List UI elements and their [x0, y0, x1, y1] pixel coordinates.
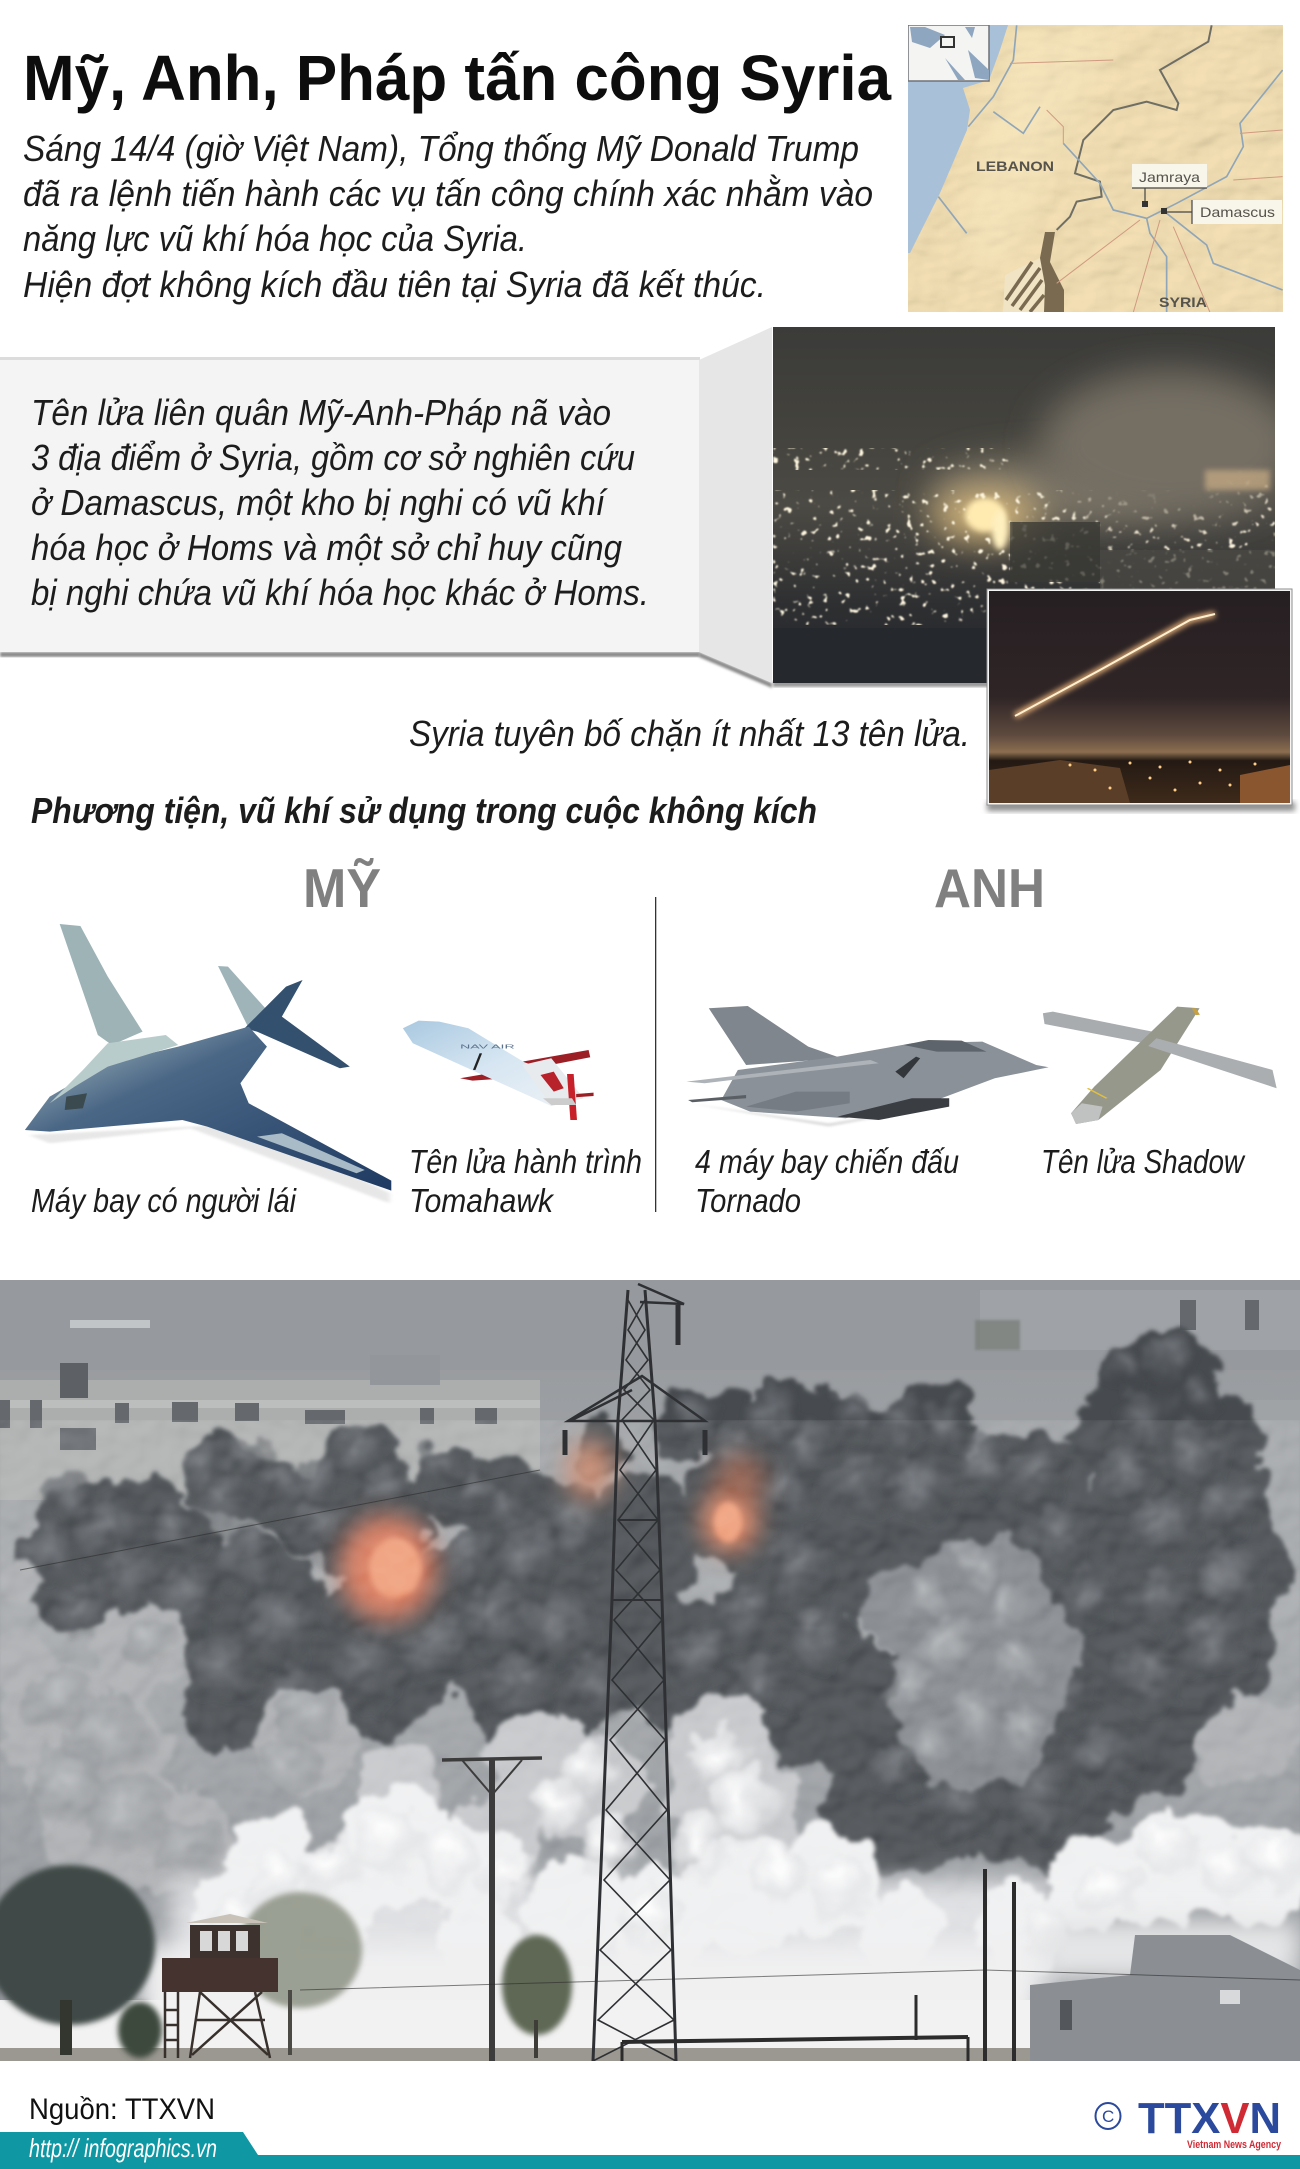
- heading: UK: ANH: [934, 857, 1045, 919]
- ruined building: [1030, 1935, 1300, 2061]
- title: Mỹ, Anh, Pháp tấn công Syria: [23, 42, 891, 114]
- fire glow: [340, 1440, 765, 1620]
- intro text block: [23, 128, 873, 305]
- white smoke: [170, 1880, 1050, 1990]
- heading: USA: MỸ: [303, 857, 381, 919]
- white smoke billows: [210, 1730, 1300, 1956]
- buildings: [0, 1290, 1300, 1500]
- ground: [140, 1945, 1040, 2050]
- panel text: hóa học ở Homs và một sở chỉ huy cũng: [31, 527, 622, 568]
- agency wordmark: TTXVN: [1138, 2094, 1281, 2143]
- label: Tomahawk: [409, 1143, 642, 1219]
- map label Lebanon: LEBANON: [976, 158, 1054, 174]
- map label Jamraya: [1132, 164, 1207, 207]
- trees: [0, 1865, 572, 2058]
- photo: smoke over city: [0, 1280, 1300, 2061]
- footer url: http:// infographics.vn: [29, 2133, 217, 2163]
- utility pole: [442, 1758, 542, 2061]
- divider between countries: [655, 897, 656, 1212]
- map label Damascus: [1161, 200, 1282, 224]
- caption: Syria claim: Syria tuyên bố chặn ít nhất 13 tên lửa.: [409, 713, 970, 754]
- watchtower: [162, 1914, 278, 2058]
- map label Jamraya: Jamraya: [1139, 169, 1200, 185]
- panel fold: [699, 327, 772, 683]
- source line: Nguồn: TTXVN: [29, 2093, 215, 2126]
- panel text: ở Damascus, một kho bị nghi có vũ khí: [31, 482, 608, 523]
- icon: Tomahawk missile: NAV AIR: [460, 1044, 515, 1050]
- poles and field frame: [20, 1470, 1300, 2061]
- dark smoke billows: [23, 1336, 1264, 1844]
- light grey smoke: [0, 1560, 1300, 1893]
- icon: Tomahawk missile: [403, 1021, 594, 1120]
- intro text block: năng lực vũ khí hóa học của Syria.: [23, 218, 527, 259]
- panel text: 3 địa điểm ở Syria, gồm cơ sở nghiên cứu: [31, 437, 635, 478]
- dark smoke: [21, 1332, 1290, 1876]
- copyright mark: C: [1102, 2107, 1114, 2126]
- heading: weapons used: Phương tiện, vũ khí sử dụng trong cuộc không kích: [31, 790, 817, 831]
- golan hatched area: [1003, 232, 1064, 312]
- intro text block: Hiện đợt không kích đầu tiên tại Syria đã kết thúc.: [23, 264, 766, 305]
- panel: strike summary: [0, 327, 772, 688]
- icon: Tornado fighter jet: [686, 1006, 1049, 1127]
- intro text block: Sáng 14/4 (giờ Việt Nam), Tổng thống Mỹ Donald Trump: [23, 128, 859, 169]
- photo: Damascus night explosion: [773, 327, 1300, 687]
- label: Tornado: 4 máy bay chiến đấu: [695, 1143, 959, 1180]
- copyright mark: [1096, 2103, 1120, 2129]
- panel text: [31, 392, 649, 613]
- label: Tornado: [695, 1143, 959, 1219]
- logo: TTXVN: [1096, 2094, 1282, 2151]
- intro text block: đã ra lệnh tiến hành các vụ tấn công chính xác nhằm vào: [23, 173, 873, 214]
- map of Lebanon and Syria: [908, 25, 1283, 312]
- label: Shadow missile: Tên lửa Shadow: [1041, 1143, 1246, 1180]
- transmission pylon: [565, 1284, 705, 2061]
- footer band: [0, 2132, 1300, 2169]
- inset locator map: [908, 25, 989, 81]
- photo: missile streak over city: [987, 589, 1295, 811]
- panel text: bị nghi chứa vũ khí hóa học khác ở Homs.: [31, 572, 649, 613]
- pale smoke: [356, 1694, 800, 1890]
- label: Tornado: Tornado: [695, 1182, 801, 1219]
- label: Tomahawk: Tên lửa hành trình: [409, 1143, 642, 1180]
- light grey billows: [26, 1612, 344, 1882]
- panel text: Tên lửa liên quân Mỹ-Anh-Pháp nã vào: [31, 392, 611, 433]
- label: piloted aircraft: Máy bay có người lái: [31, 1182, 297, 1219]
- icon: B-1 bomber: [25, 924, 391, 1203]
- mid grey billows: [882, 1546, 1058, 1776]
- icon: Storm Shadow missile: [1043, 1007, 1277, 1124]
- label: Tomahawk: Tomahawk: [409, 1182, 554, 1219]
- map label Damascus: Damascus: [1200, 204, 1275, 220]
- mid grey cloud: [864, 1532, 1084, 1790]
- smoke texture: [0, 1420, 1300, 2060]
- map label Syria: SYRIA: [1159, 294, 1207, 310]
